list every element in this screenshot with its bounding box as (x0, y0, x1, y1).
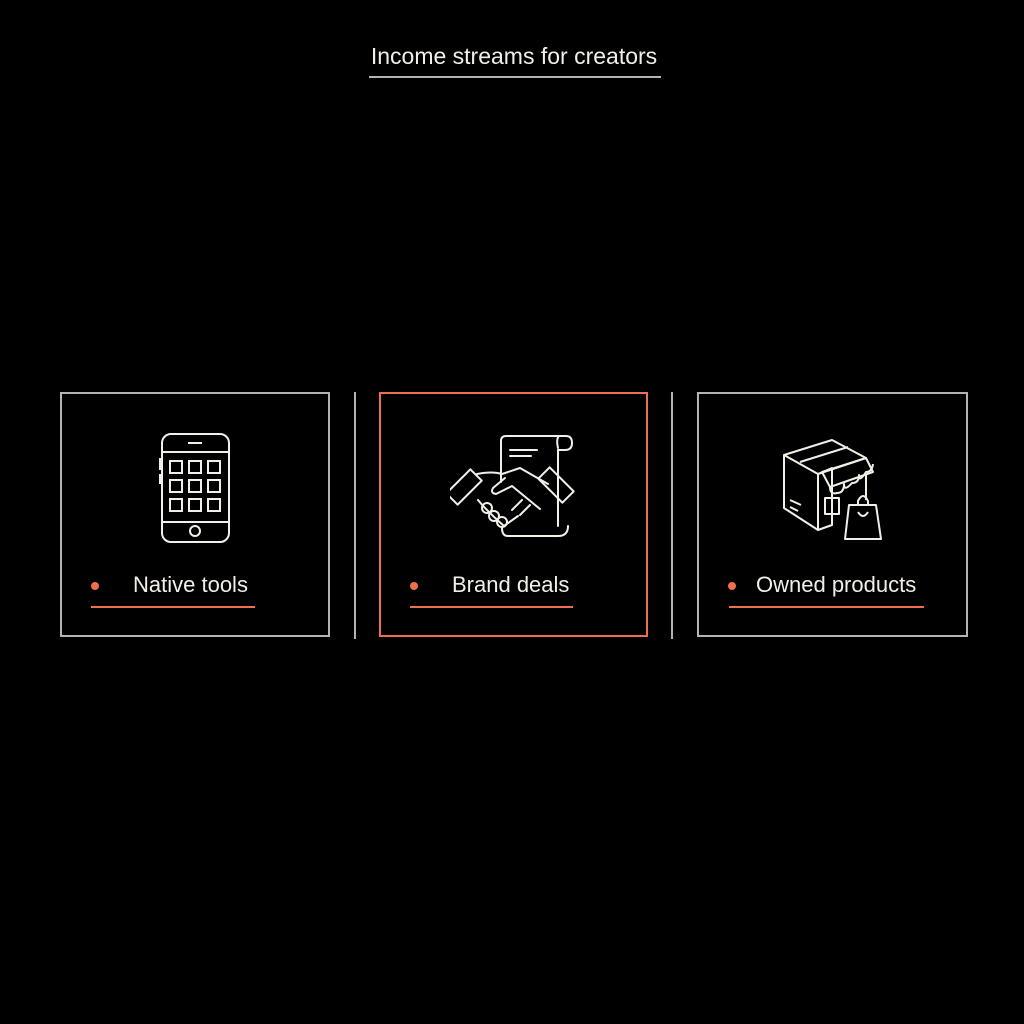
underline (410, 606, 573, 608)
title underline (369, 76, 661, 78)
bullet (91, 582, 99, 590)
icon: handshake with contract (450, 435, 575, 537)
underline (91, 606, 255, 608)
panel: owned products (697, 392, 968, 637)
divider (671, 392, 673, 639)
underline (729, 606, 924, 608)
panel: brand deals (379, 392, 648, 637)
label: native tools: Native tools (133, 572, 248, 597)
label: owned products: Owned products (756, 572, 916, 597)
panel: native tools (60, 392, 330, 637)
label: brand deals: Brand deals (452, 572, 569, 597)
title: Income streams for creators (371, 43, 657, 69)
bullet (728, 582, 736, 590)
icon: shop box with bag (783, 439, 882, 540)
icon: phone (159, 433, 230, 543)
divider (354, 392, 356, 639)
bullet (410, 582, 418, 590)
